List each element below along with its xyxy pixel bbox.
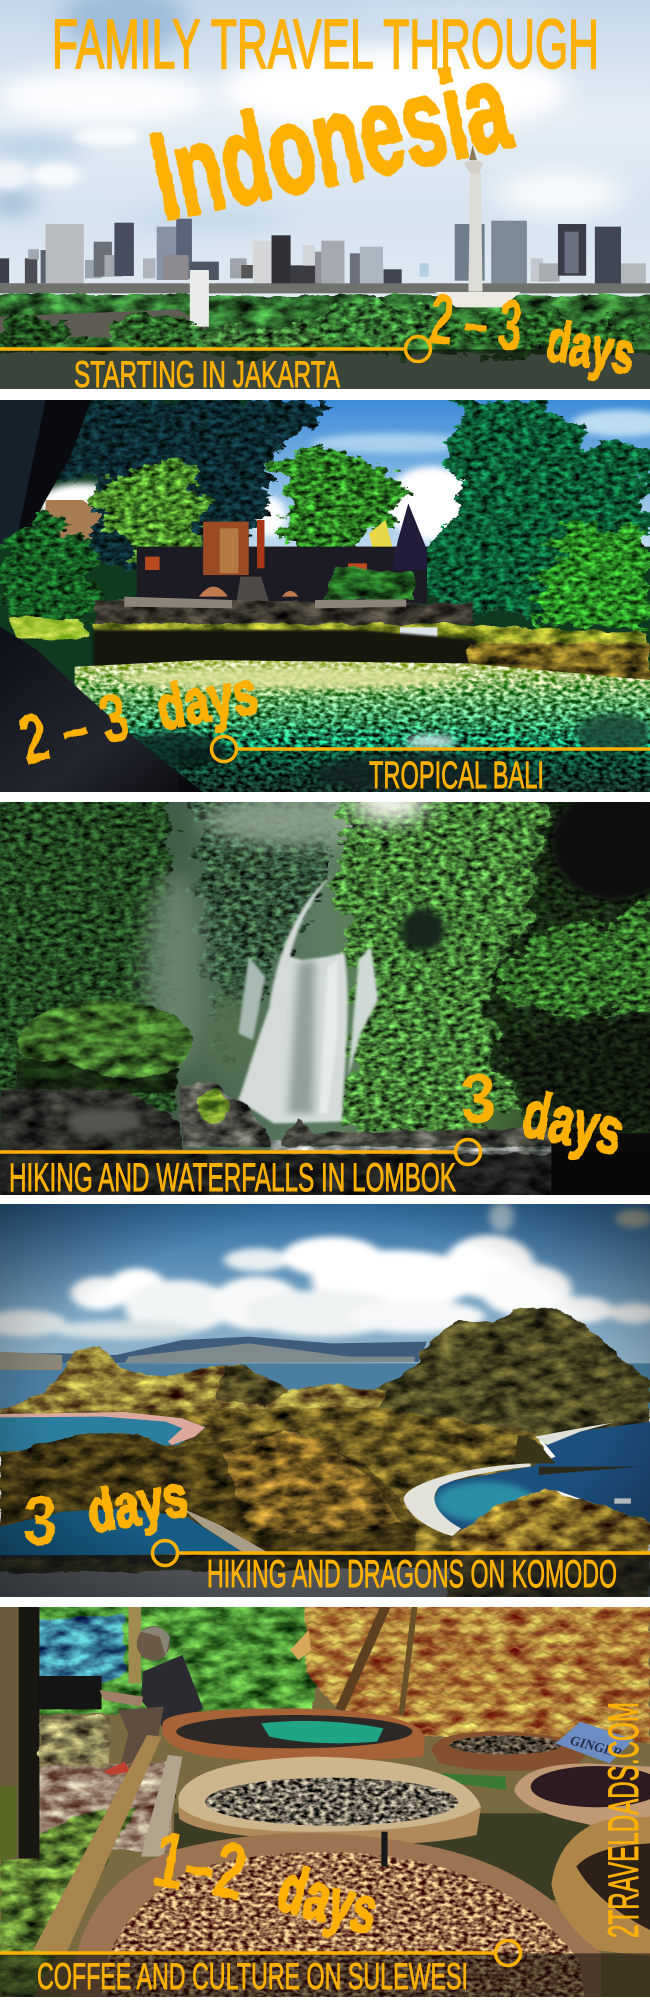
duration: 3 (23, 1481, 57, 1559)
caption: TROPICAL BALI (369, 755, 544, 797)
duration (147, 1814, 386, 1948)
photo: Bali temple and lotus pond (0, 400, 650, 792)
duration: 2 – 3 (11, 677, 137, 779)
coffee basket middle (178, 1757, 481, 1844)
woman (99, 1626, 203, 1775)
duration (23, 1462, 192, 1559)
duration: days (152, 658, 262, 743)
duration: 2 – 3 (427, 279, 525, 367)
panel: Jakarta (0, 0, 650, 395)
timeline marker (0, 1140, 480, 1164)
photo: Komodo bays and hills (0, 1204, 650, 1597)
panel: Lombok (0, 780, 650, 1207)
panel: Bali (0, 400, 650, 797)
duration: days (271, 1851, 386, 1948)
sign text: GINGER (568, 1733, 625, 1760)
right bay (404, 1422, 650, 1536)
woven wall (305, 1600, 650, 1743)
top basket (162, 1708, 425, 1761)
timeline marker (152, 1540, 650, 1566)
duration (427, 279, 640, 387)
duration: 1–2 (147, 1814, 253, 1917)
photo: Jakarta skyline (0, 0, 650, 389)
left bay (0, 1412, 205, 1452)
site credit: 2TRAVELDADS.COM (600, 1702, 648, 1938)
coffee basket front (70, 1833, 601, 1998)
right baskets (431, 1722, 650, 1827)
Monas monument (435, 145, 521, 307)
photo: coffee baskets (0, 1607, 650, 1997)
caption: STARTING IN JAKARTA (74, 354, 340, 395)
timeline marker (0, 1940, 520, 1966)
timeline marker (212, 736, 650, 762)
duration (11, 658, 262, 779)
photo: Lombok waterfall (0, 802, 650, 1195)
duration (461, 1059, 630, 1169)
temple (137, 503, 427, 603)
waterfall (238, 875, 378, 1123)
mossy boulder (17, 1000, 193, 1093)
timeline marker (0, 336, 430, 362)
panel: Komodo (0, 1200, 650, 1598)
duration: 3 (461, 1059, 495, 1137)
duration: days (82, 1462, 192, 1545)
panel: Sulawesi (0, 1600, 650, 1998)
